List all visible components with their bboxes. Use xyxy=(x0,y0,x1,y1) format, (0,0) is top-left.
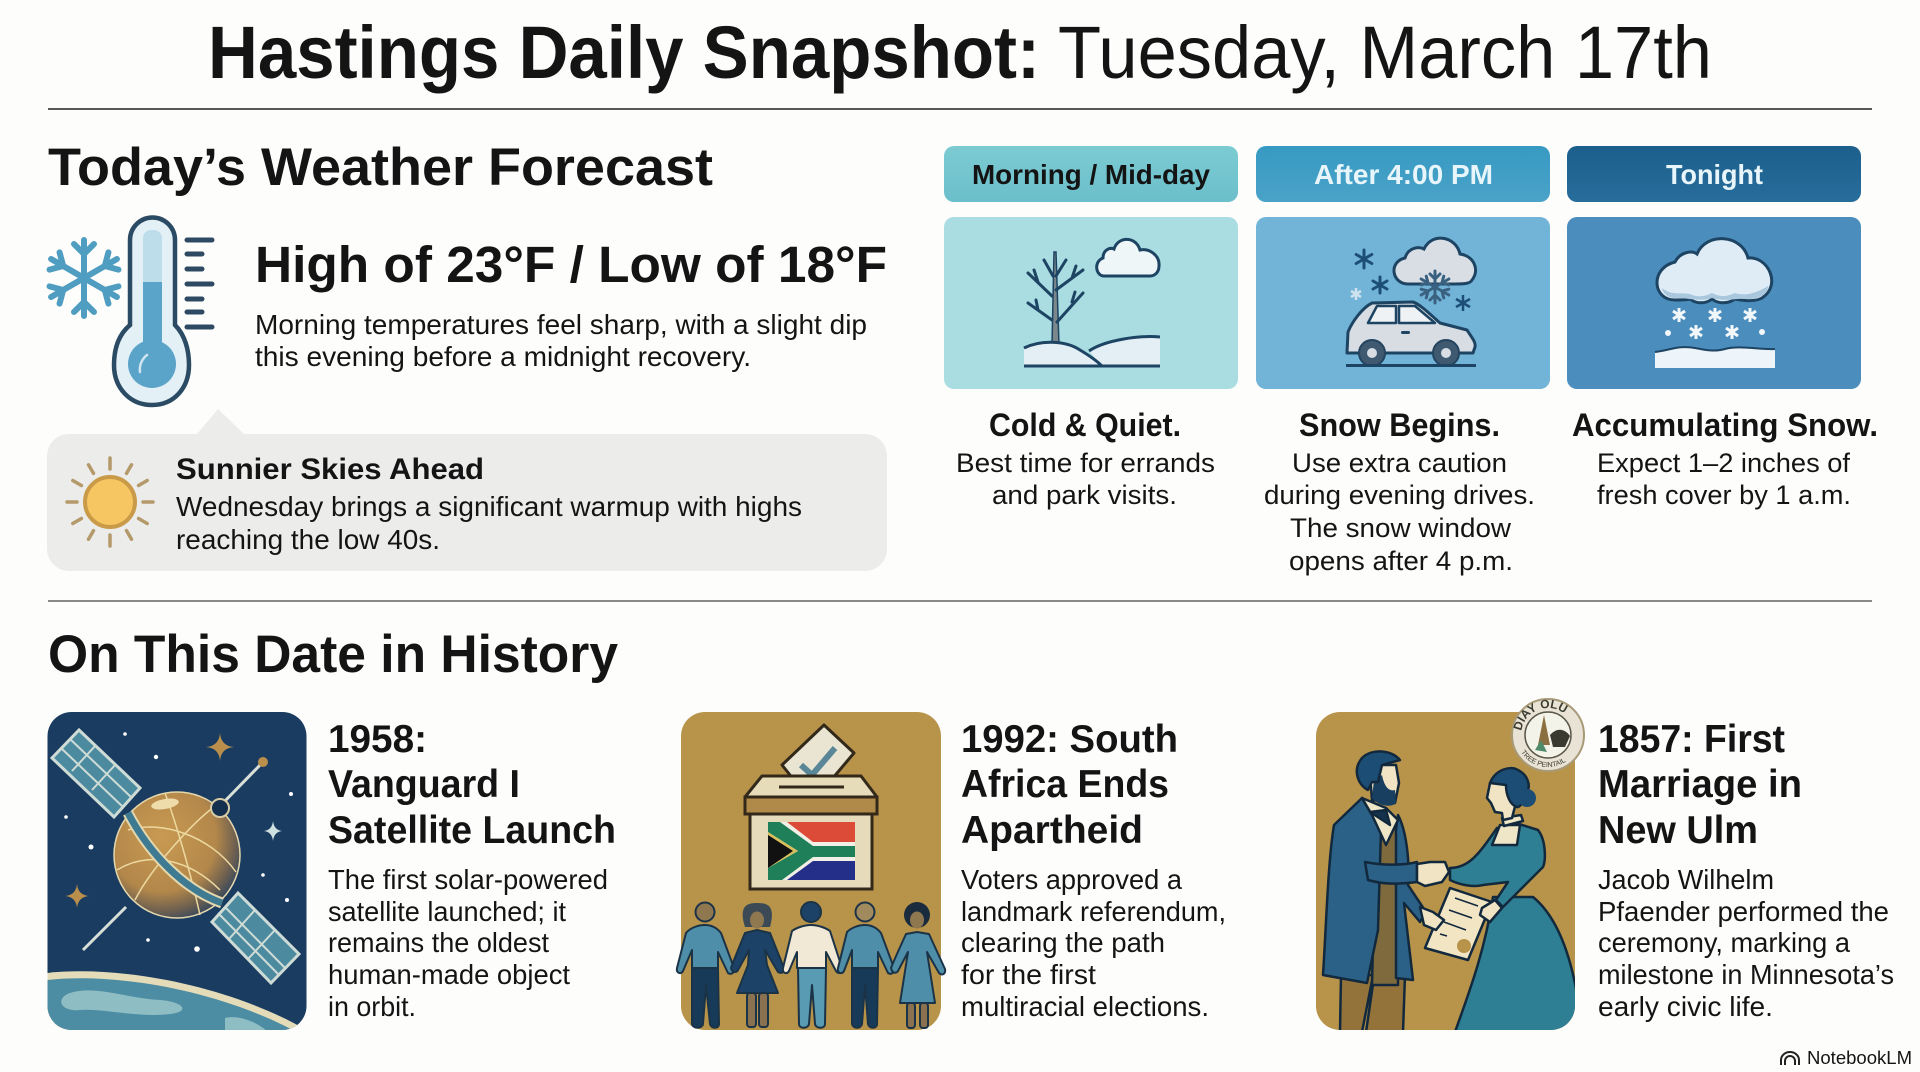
title: Tuesday, March 17th xyxy=(1058,11,1712,94)
callout text: reaching the low 40s. xyxy=(176,524,440,555)
temperature text block: this evening before a midnight recovery. xyxy=(255,341,751,372)
text: Vanguard: Vanguard I xyxy=(328,763,520,806)
text: New Ulm: Pfaender performed the xyxy=(1598,896,1889,927)
text: South Africa xyxy=(961,718,1226,1022)
text: snow begins: The snow window xyxy=(1290,513,1512,543)
icon: snowflake xyxy=(46,240,122,316)
figures holding hands xyxy=(677,902,945,1028)
title: Hastings Daily Snapshot: xyxy=(208,11,1040,94)
title xyxy=(208,11,1712,94)
pill: tonight: Tonight xyxy=(1666,159,1763,190)
text: snow begins: during evening drives. xyxy=(1264,480,1535,510)
text: cold and quiet: Cold & Quiet. xyxy=(989,407,1181,443)
card: snow and car illustration xyxy=(1256,217,1550,389)
text: Vanguard: remains the oldest xyxy=(328,927,549,958)
icon: round seal badge: DIAY OLU xyxy=(1513,700,1568,730)
text: cold and quiet: and park visits. xyxy=(992,480,1177,510)
icon: thermometer xyxy=(114,218,212,405)
panel: tonight forecast xyxy=(1567,146,1878,510)
text: cold and quiet xyxy=(956,407,1215,510)
NotebookLM logo: NotebookLM xyxy=(1807,1048,1912,1068)
temperature text block: High of 23°F / Low of 18°F xyxy=(255,236,887,293)
text: accumulating snow: fresh cover by 1 a.m. xyxy=(1597,480,1851,510)
card: accumulating snow illustration xyxy=(1567,217,1861,389)
text: South Africa: landmark referendum, xyxy=(961,896,1226,927)
pill: morning xyxy=(944,146,1238,202)
text: snow begins xyxy=(1264,407,1535,576)
panel: sunnier skies callout xyxy=(47,409,887,571)
text: Vanguard: human-made object xyxy=(328,959,570,990)
panel: 1992 South Africa xyxy=(677,712,1226,1030)
text: Vanguard: The first solar-powered xyxy=(328,864,608,895)
text: South Africa: clearing the path xyxy=(961,927,1165,958)
text: accumulating snow: Accumulating Snow. xyxy=(1572,407,1878,443)
temperature text block xyxy=(255,236,887,372)
icon: round seal badge xyxy=(1511,698,1585,772)
text: New Ulm: ceremony, marking a xyxy=(1598,927,1850,958)
text: South Africa: Voters approved a xyxy=(961,864,1182,895)
text: Vanguard: Satellite Launch xyxy=(328,809,616,852)
text: New Ulm: milestone in Minnesota’s xyxy=(1598,959,1894,990)
text: South Africa: multiracial elections. xyxy=(961,991,1209,1022)
heading: weather forecast: Today’s Weather Forecast xyxy=(48,138,713,197)
text: South Africa: 1992: South xyxy=(961,718,1178,761)
card: cold and quiet illustration xyxy=(944,217,1238,389)
pill: morning: Morning / Mid-day xyxy=(972,159,1210,190)
text: New Ulm: early civic life. xyxy=(1598,991,1773,1022)
icon: sun xyxy=(67,458,153,546)
panel: after 4 pm forecast xyxy=(1256,146,1550,576)
text: New Ulm: Marriage in xyxy=(1598,763,1802,806)
illustration: satellite xyxy=(47,712,310,1034)
text: snow begins: Snow Begins. xyxy=(1299,407,1500,443)
text: accumulating snow xyxy=(1572,407,1878,510)
text: Vanguard: 1958: xyxy=(328,718,427,761)
icon: round seal badge: TREE PEINTAIL xyxy=(1522,749,1566,768)
text: cold and quiet: Best time for errands xyxy=(956,448,1215,478)
text: New Ulm: Jacob Wilhelm xyxy=(1598,864,1774,895)
text: snow begins: Use extra caution xyxy=(1292,448,1507,478)
text: Vanguard: in orbit. xyxy=(328,991,416,1022)
text: Vanguard xyxy=(328,718,616,1022)
panel: 1958 Vanguard xyxy=(47,712,616,1034)
callout text: Sunnier Skies Ahead xyxy=(176,453,484,486)
pill: tonight xyxy=(1567,146,1861,202)
text: New Ulm xyxy=(1598,718,1894,1022)
temperature text block: Morning temperatures feel sharp, with a slight dip xyxy=(255,309,867,340)
heading: on this date in history: On This Date in History xyxy=(48,625,619,684)
text: South Africa: Apartheid xyxy=(961,809,1143,852)
text: accumulating snow: Expect 1–2 inches of xyxy=(1597,448,1850,478)
text: New Ulm: New Ulm xyxy=(1598,809,1758,852)
pill: after 4 pm: After 4:00 PM xyxy=(1314,159,1493,190)
text: South Africa: for the first xyxy=(961,959,1096,990)
illustration: ballot box xyxy=(681,712,941,1030)
illustration: couple and document xyxy=(1316,712,1578,1032)
text: snow begins: opens after 4 p.m. xyxy=(1289,546,1513,576)
callout text: Wednesday brings a significant warmup with highs xyxy=(176,491,802,522)
panel: 1857 New Ulm xyxy=(1316,698,1894,1030)
text: New Ulm: 1857: First xyxy=(1598,718,1785,761)
panel: morning forecast xyxy=(944,146,1238,510)
text: South Africa: Africa Ends xyxy=(961,763,1169,806)
callout text xyxy=(176,453,802,555)
pill: after 4 pm xyxy=(1256,146,1550,202)
text: Vanguard: satellite launched; it xyxy=(328,896,566,927)
